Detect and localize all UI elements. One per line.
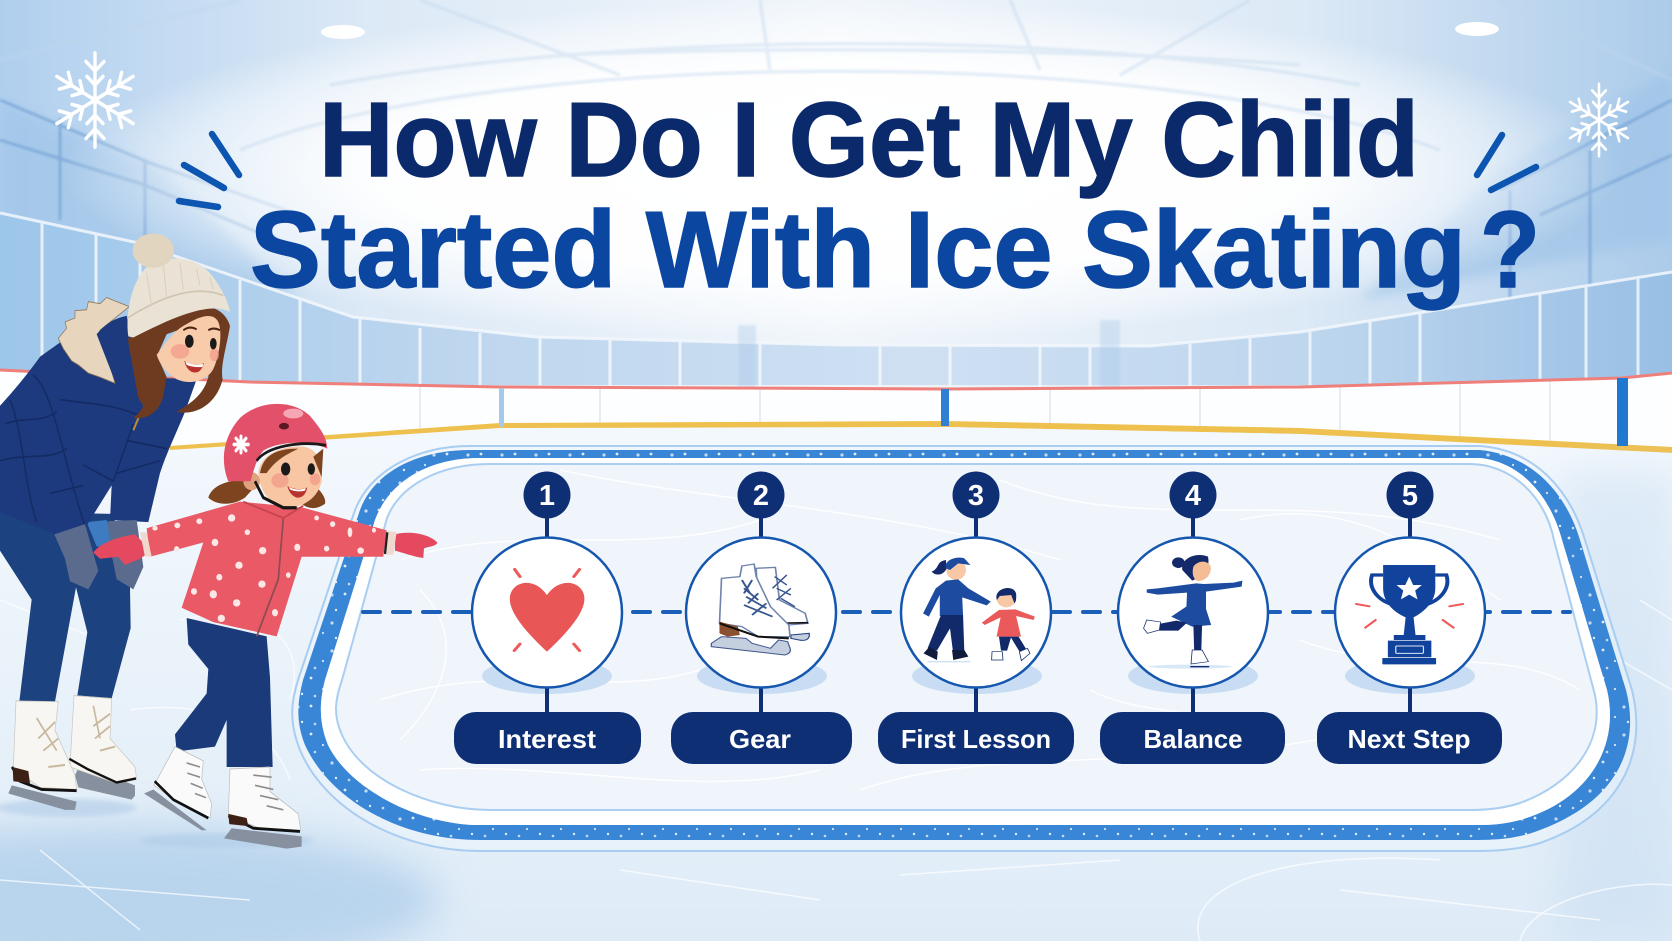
step 1 label [454,712,641,764]
step 3: First Lesson [878,472,1074,764]
child skate right [224,767,302,849]
icon: heart [510,569,584,652]
child jacket [147,502,387,636]
step 5 label [1317,712,1502,764]
title question mark: ? [1480,189,1540,311]
child skate left [144,747,212,830]
child face [258,447,322,508]
step 5: Next Step [1317,472,1502,764]
step 1 shadow [482,658,612,694]
step 5 shadow [1345,658,1475,694]
step 2 connectors [759,515,763,716]
step 2 badge: 2 [753,480,769,512]
step 3 connectors [974,515,978,716]
step 3 badge: 3 [968,480,984,512]
step 2 label [671,712,852,764]
title line 2: Started With Ice Skating [250,189,1466,311]
step 3 circle [901,538,1051,688]
light fixture left [321,25,365,39]
step 1 badge: 1 [539,480,555,512]
title line 1: How Do I Get My Child [319,81,1419,199]
mother gloves [54,520,143,589]
step 3 badge [952,472,1000,518]
step 1 connectors [545,515,549,716]
mother coat [0,316,197,534]
step 5 label: Next Step [1348,724,1470,754]
mother face [157,316,220,382]
icon: trophy [1356,565,1463,664]
step 2 label: Gear [729,724,791,754]
step 3 shadow [912,658,1042,694]
illustration: child skater [93,404,437,849]
step 4 label [1100,712,1285,764]
panel: rink-shaped steps outline [292,446,1636,851]
step 4 connectors [1191,515,1195,716]
icon: snowflake right [1567,84,1631,156]
step 4 circle [1118,538,1268,688]
mother skate far [69,696,137,800]
child hair [208,480,325,508]
step 5 connectors [1408,515,1412,716]
step 3 label [878,712,1074,764]
mother hat [127,258,230,338]
step 4 label: Balance [1144,724,1242,754]
step 4 badge: 4 [1185,480,1201,512]
step 2 badge [738,472,784,518]
child helmet [224,404,327,481]
mother hair [126,304,230,418]
step 1: Interest [454,472,641,764]
step 5 badge: 5 [1402,480,1418,512]
step 5 circle [1335,538,1485,688]
mother jeans [0,512,131,702]
step 4: Balance [1100,472,1285,764]
child pants [175,618,273,767]
dashed connector line [363,610,1570,614]
step 5 badge [1386,472,1434,518]
icon: snowflake left [52,53,138,147]
accent: burst lines right [1477,135,1536,190]
step 1 badge [524,472,570,518]
light fixture right [1455,22,1499,36]
step 2 shadow [697,658,827,694]
accent: burst lines left [179,134,239,207]
illustration: mother skater [0,233,230,817]
mother fur hood [58,298,129,383]
icon: coach and child [923,558,1035,662]
step 2 circle [686,538,836,688]
step 4 shadow [1128,658,1258,694]
step 1 label: Interest [498,724,596,754]
mother skate near [8,701,77,810]
step 3 label: First Lesson [901,724,1051,754]
step 4 badge [1170,472,1216,518]
icon: balancing skater [1144,555,1242,669]
step 2: Gear [671,472,852,764]
title [250,81,1540,311]
icon: skates [711,564,809,655]
step 1 circle [472,538,622,688]
child mittens [93,533,437,565]
